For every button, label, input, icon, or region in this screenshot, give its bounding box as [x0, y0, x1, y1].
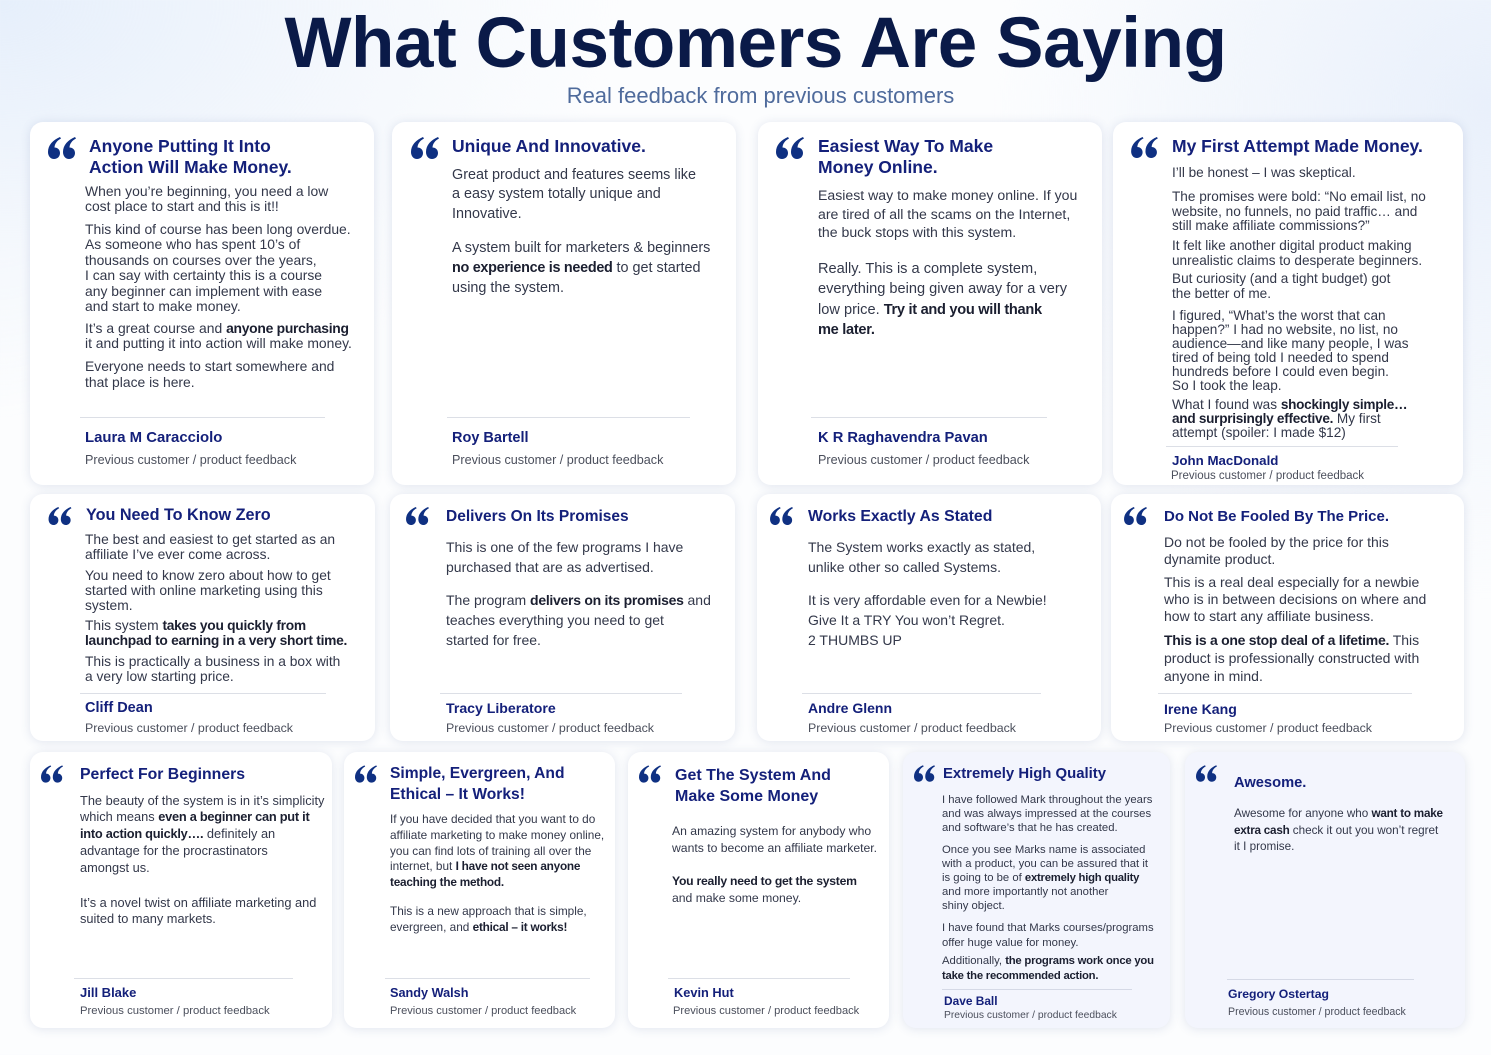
- text block: [1164, 574, 1426, 624]
- customer role: Previous customer / product feedback: [80, 1005, 270, 1017]
- panel: Sandy Walsh testimonial: [344, 752, 615, 1028]
- title: What Customers Are Saying: [284, 4, 1227, 83]
- text block: [1164, 534, 1389, 567]
- text block: Additionally, the programs work once you: [942, 955, 1154, 967]
- text block: any beginner can implement with ease: [85, 283, 322, 299]
- text block: unlike other so called Systems.: [808, 559, 1001, 575]
- customer role: Previous customer / product feedback: [1171, 470, 1364, 482]
- text block: which means even a beginner can put it: [80, 809, 309, 824]
- text block: [390, 812, 604, 889]
- heading: [89, 136, 292, 177]
- text block: low price. Try it and you will thank: [818, 302, 1042, 318]
- heading: Perfect For Beginners: [80, 766, 245, 783]
- customer role: Previous customer / product feedback: [390, 1005, 576, 1017]
- text block: Everyone needs to start somewhere and: [85, 358, 334, 374]
- customer role: Previous customer / product feedback: [85, 721, 293, 735]
- text block: It is very affordable even for a Newbie!: [808, 592, 1047, 608]
- text block: [446, 592, 711, 648]
- heading: [818, 136, 993, 177]
- text block: offer huge value for money.: [942, 936, 1078, 948]
- icon: quote mark: [1124, 507, 1147, 525]
- heading: Get The System And: [675, 766, 831, 784]
- text block: it I promise.: [1234, 840, 1294, 853]
- text block: This kind of course has been long overdue.: [85, 221, 351, 237]
- text block: affiliate marketing to make money online,: [390, 828, 604, 842]
- text block: Give It a TRY You won’t Regret.: [808, 612, 1005, 628]
- text block: This system takes you quickly from: [85, 618, 306, 632]
- text block: cost place to start and this is it!!: [85, 198, 279, 214]
- text block: If you have decided that you want to do: [390, 812, 595, 826]
- text block: extra cash check it out you won’t regret: [1234, 824, 1438, 836]
- text block: started for free.: [446, 632, 541, 648]
- customer name: Irene Kang: [1164, 701, 1237, 717]
- icon: quote mark: [776, 137, 804, 159]
- text block: [942, 793, 1152, 835]
- text block: teaches everything you need to get: [446, 612, 664, 628]
- text block: The promises were bold: “No email list, no: [1172, 189, 1426, 204]
- panel: K R Raghavendra Pavan testimonial: [758, 122, 1102, 485]
- heading: Works Exactly As Stated: [808, 508, 992, 525]
- text block: [80, 793, 324, 875]
- text block: website, no funnels, no paid traffic… and: [1172, 204, 1417, 218]
- text block: [818, 187, 1077, 240]
- text block: [672, 822, 877, 856]
- heading: Unique And Innovative.: [452, 136, 646, 156]
- text block: unrealistic claims to desperate beginners.: [1172, 252, 1422, 268]
- text block: This is a new approach that is simple,: [390, 904, 587, 918]
- text block: [818, 261, 1067, 338]
- text block: [1234, 806, 1443, 856]
- icon: quote mark: [1196, 765, 1217, 782]
- text block: thousands on courses over the years,: [85, 252, 317, 268]
- text block: and software’s that he has created.: [942, 822, 1118, 834]
- panel: Jill Blake testimonial: [30, 752, 332, 1028]
- text block: are tired of all the scams on the Internet,: [818, 206, 1070, 222]
- icon: quote mark: [1131, 137, 1158, 158]
- customer role: Previous customer / product feedback: [1228, 1006, 1406, 1018]
- customer name: Cliff Dean: [85, 700, 153, 716]
- text block: [452, 240, 710, 296]
- customer role: Previous customer / product feedback: [452, 453, 663, 467]
- heading: Easiest Way To Make: [818, 136, 993, 156]
- customer role: Previous customer / product feedback: [673, 1005, 859, 1017]
- text block: attempt (spoiler: I made $12): [1172, 425, 1346, 440]
- customer name: Kevin Hut: [674, 985, 734, 1000]
- text block: Innovative.: [452, 206, 522, 222]
- heading: Extremely High Quality: [943, 766, 1106, 782]
- text block: system.: [85, 598, 133, 612]
- text block: [85, 654, 340, 684]
- customer name: Sandy Walsh: [390, 986, 468, 1000]
- icon: quote mark: [411, 137, 439, 159]
- text block: [85, 568, 331, 613]
- text block: and more importantly not another: [942, 886, 1108, 898]
- text block: [942, 843, 1148, 913]
- text block: [85, 320, 352, 351]
- icon: quote mark: [406, 507, 429, 525]
- icon: quote mark: [48, 137, 76, 159]
- text block: hundreds before I could even begin.: [1172, 364, 1389, 379]
- text block: Great product and features seems like: [452, 167, 696, 183]
- customer name: Tracy Liberatore: [446, 700, 556, 716]
- text block: no experience is needed to get started: [452, 260, 701, 276]
- text block: [1172, 308, 1409, 393]
- heading: Simple, Evergreen, And: [390, 765, 564, 782]
- text block: using the system.: [452, 280, 564, 296]
- text block: happen?” I had no website, no list, no: [1172, 322, 1398, 337]
- text block: I can say with certainty this is a course: [85, 267, 322, 283]
- text block: [672, 872, 857, 906]
- text block: An amazing system for anybody who: [672, 824, 871, 838]
- customer role: Previous customer / product feedback: [818, 453, 1029, 467]
- text block: a easy system totally unique and: [452, 186, 661, 202]
- text block: I figured, “What’s the worst that can: [1172, 308, 1386, 323]
- text block: It’s a great course and anyone purchasing: [85, 320, 349, 336]
- text block: Really. This is a complete system,: [818, 261, 1037, 277]
- customer role: Previous customer / product feedback: [808, 721, 1016, 735]
- icon: quote mark: [639, 765, 661, 783]
- text block: the better of me.: [1172, 286, 1271, 300]
- text block: how to start any affiliate business.: [1164, 608, 1374, 624]
- panel: Dave Ball testimonial: [903, 752, 1170, 1028]
- text block: launchpad to earning in a very short time.: [85, 632, 347, 648]
- text block: As someone who has spent 10’s of: [85, 236, 300, 252]
- heading: Ethical – It Works!: [390, 786, 525, 802]
- text block: the buck stops with this system.: [818, 224, 1016, 240]
- panel: Tracy Liberatore testimonial: [390, 494, 735, 741]
- panel: Laura M Caracciolo testimonial: [30, 122, 374, 485]
- text block: dynamite product.: [1164, 550, 1275, 566]
- text block: amongst us.: [80, 860, 150, 875]
- icon: quote mark: [914, 765, 935, 782]
- text block: Awesome for anyone who want to make: [1234, 807, 1443, 820]
- text block: A system built for marketers & beginners: [452, 240, 710, 256]
- text block: This is a real deal especially for a newbie: [1164, 574, 1419, 590]
- heading: [390, 765, 564, 802]
- text block: [446, 539, 683, 575]
- customer name: K R Raghavendra Pavan: [818, 430, 988, 446]
- text block: [390, 904, 587, 936]
- text block: It’s a novel twist on affiliate marketing and: [80, 895, 316, 910]
- heading: Anyone Putting It Into: [89, 136, 271, 156]
- customer role: Previous customer / product feedback: [1164, 721, 1372, 735]
- text block: Once you see Marks name is associated: [942, 844, 1145, 856]
- text block: into action quickly…. definitely an: [80, 826, 275, 841]
- text block: But curiosity (and a tight budget) got: [1172, 271, 1390, 286]
- customer role: Previous customer / product feedback: [85, 453, 296, 467]
- panel: Irene Kang testimonial: [1111, 494, 1464, 741]
- customer name: Roy Bartell: [452, 430, 529, 446]
- heading: Action Will Make Money.: [89, 157, 292, 177]
- text block: [85, 183, 328, 214]
- text block: 2 THUMBS UP: [808, 632, 902, 648]
- text block: [85, 532, 335, 562]
- text block: This is practically a business in a box with: [85, 654, 340, 668]
- panel: Roy Bartell testimonial: [392, 122, 736, 485]
- text block: that place is here.: [85, 374, 195, 390]
- text block: So I took the leap.: [1172, 378, 1282, 393]
- customer name: Jill Blake: [80, 985, 136, 1000]
- customer name: Dave Ball: [944, 994, 998, 1008]
- text block: This is one of the few programs I have: [446, 539, 683, 555]
- text block: I have followed Mark throughout the years: [942, 794, 1152, 806]
- text block: The program delivers on its promises and: [446, 592, 711, 608]
- text block: You need to know zero about how to get: [85, 568, 331, 582]
- text block: Easiest way to make money online. If you: [818, 187, 1077, 203]
- text block: suited to many markets.: [80, 911, 216, 926]
- text block: [85, 221, 351, 314]
- text block: [1172, 238, 1422, 268]
- text block: is going to be of extremely high quality: [942, 872, 1139, 884]
- text block: audience—and like many people, I was: [1172, 336, 1409, 351]
- text block: started with online marketing using this: [85, 582, 323, 598]
- customer role: Previous customer / product feedback: [944, 1010, 1117, 1021]
- text block: and start to make money.: [85, 298, 241, 314]
- text block: purchased that are as advertised.: [446, 559, 654, 575]
- text block: This is a one stop deal of a lifetime. This: [1164, 632, 1419, 648]
- text block: The beauty of the system is in it’s simplicity: [80, 793, 324, 808]
- text block: everything being given away for a very: [818, 281, 1067, 297]
- text block: [808, 592, 1047, 648]
- text block: teaching the method.: [390, 875, 504, 889]
- text block: What I found was shockingly simple…: [1172, 397, 1407, 412]
- icon: quote mark: [48, 507, 72, 525]
- text block: I’ll be honest – I was skeptical.: [1172, 165, 1356, 180]
- text block: and was always impressed at the courses: [942, 808, 1151, 820]
- customer role: Previous customer / product feedback: [446, 721, 654, 735]
- text block: [1172, 397, 1407, 440]
- text block: take the recommended action.: [942, 970, 1098, 982]
- text block: shiny object.: [942, 900, 1005, 912]
- text block: tired of being told I needed to spend: [1172, 350, 1389, 365]
- text block: it and putting it into action will make money.: [85, 335, 352, 351]
- heading: Money Online.: [818, 157, 938, 177]
- text block: [85, 618, 347, 648]
- text block: [452, 167, 696, 222]
- customer name: Gregory Ostertag: [1228, 987, 1329, 1001]
- text block: evergreen, and ethical – it works!: [390, 920, 567, 934]
- heading: [675, 764, 831, 806]
- customer name: Andre Glenn: [808, 700, 892, 716]
- text block: [942, 921, 1154, 950]
- text block: [1172, 189, 1426, 233]
- text block: [808, 539, 1035, 575]
- text block: internet, but I have not seen anyone: [390, 859, 580, 873]
- icon: quote mark: [41, 765, 63, 783]
- text block: me later.: [818, 322, 875, 338]
- heading: My First Attempt Made Money.: [1172, 136, 1423, 156]
- text block: I have found that Marks courses/programs: [942, 922, 1154, 934]
- heading: Do Not Be Fooled By The Price.: [1164, 508, 1389, 525]
- text block: [80, 895, 316, 926]
- text block: The best and easiest to get started as an: [85, 532, 335, 546]
- text block: anyone in mind.: [1164, 668, 1263, 684]
- text block: you can find lots of training all over the: [390, 844, 591, 858]
- customer name: John MacDonald: [1172, 453, 1278, 468]
- text block: [1172, 271, 1390, 300]
- text block: [1164, 632, 1419, 684]
- text block: still make affiliate commissions?”: [1172, 218, 1370, 233]
- text block: affiliate I’ve ever come across.: [85, 546, 270, 562]
- heading: You Need To Know Zero: [86, 506, 271, 524]
- text block: You really need to get the system: [672, 874, 857, 888]
- text block: who is in between decisions on where and: [1164, 590, 1426, 606]
- text block: Do not be fooled by the price for this: [1164, 534, 1389, 550]
- icon: quote mark: [355, 765, 377, 783]
- text block: and surprisingly effective. My first: [1172, 411, 1381, 426]
- panel: Kevin Hut testimonial: [628, 752, 889, 1028]
- panel: Andre Glenn testimonial: [757, 494, 1101, 741]
- customer name: Laura M Caracciolo: [85, 430, 222, 446]
- panel: Gregory Ostertag testimonial: [1185, 752, 1465, 1028]
- icon: quote mark: [770, 507, 793, 525]
- text block: advantage for the procrastinators: [80, 843, 268, 858]
- text block: product is professionally constructed with: [1164, 650, 1419, 666]
- panel: Cliff Dean testimonial: [30, 494, 375, 741]
- text block: The System works exactly as stated,: [808, 539, 1035, 555]
- text block: with a product, you can be assured that it: [942, 858, 1148, 870]
- heading: Awesome.: [1234, 775, 1306, 791]
- panel: John MacDonald testimonial: [1113, 122, 1463, 485]
- text block: When you’re beginning, you need a low: [85, 183, 328, 199]
- subtitle: Real feedback from previous customers: [567, 83, 954, 108]
- text block: [85, 358, 334, 390]
- text block: It felt like another digital product making: [1172, 238, 1412, 253]
- text block: a very low starting price.: [85, 668, 234, 684]
- text block: and make some money.: [672, 890, 801, 904]
- heading: Make Some Money: [675, 788, 818, 804]
- heading: Delivers On Its Promises: [446, 508, 629, 525]
- text block: wants to become an affiliate marketer.: [672, 840, 877, 854]
- text block: [942, 954, 1154, 984]
